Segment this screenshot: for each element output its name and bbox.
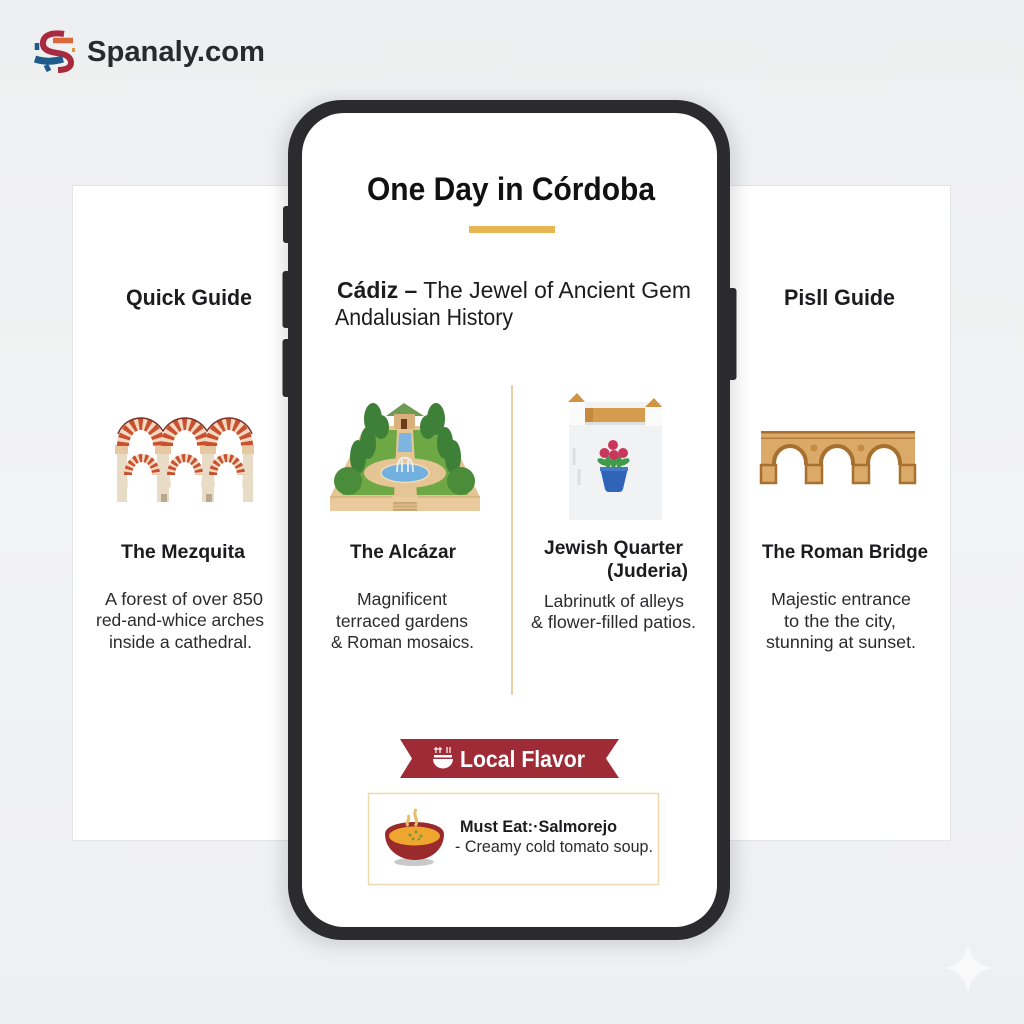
attraction title: The Roman Bridge: The Roman Bridge: [762, 542, 928, 563]
logo wordmark: Spanaly.com: [87, 36, 265, 68]
attraction description: Roman Bridge: Majestic entrance: [771, 589, 911, 609]
subtitle: Cádiz – The Jewel of Ancient Gem: [337, 277, 691, 303]
column: The Alcázar: [330, 403, 480, 652]
attraction description: Jewish Quarter: Labrinutk of alleys: [544, 591, 684, 611]
banner: Local Flavor: [400, 739, 619, 778]
attraction description: Alcázar: terraced gardens: [336, 611, 468, 631]
attraction description: Mezquita: red-and-whice arches: [96, 610, 264, 630]
attraction description: Jewish Quarter: [531, 591, 696, 632]
attraction title: Jewish Quarter (Juderia): [544, 538, 688, 582]
subtitle: [335, 277, 691, 330]
icon: Roman bridge: [761, 431, 915, 484]
title underline: [469, 226, 555, 233]
callout text: Must Eat:·Salmorejo: [460, 817, 617, 836]
icon: whitewashed wall with flower pot: [568, 393, 662, 520]
attraction description: Mezquita: [96, 589, 264, 652]
attraction description: Mezquita: A forest of over 850: [105, 589, 263, 609]
left card heading: Quick Guide: [126, 285, 252, 310]
callout text: - Creamy cold tomato soup.: [455, 837, 653, 856]
attraction description: Jewish Quarter: & flower-filled patios.: [531, 612, 696, 632]
attraction description: Alcázar: Magnificent: [357, 589, 447, 609]
icon: bowl: [433, 747, 453, 768]
phone frame: [282, 100, 736, 940]
attraction description: Alcázar: [331, 589, 474, 652]
attraction title: Jewish Quarter (Juderia): Jewish Quarter: [544, 538, 684, 559]
attraction title: The Alcázar: The Alcázar: [350, 542, 457, 563]
icon: Mezquita arches: [115, 418, 254, 502]
icon: logo mark: [35, 33, 75, 71]
attraction description: Alcázar: & Roman mosaics.: [331, 632, 474, 652]
panel: left card: [72, 186, 302, 840]
attraction title: The Mezquita: The Mezquita: [121, 542, 245, 563]
callout text: [455, 817, 653, 856]
attraction description: Roman Bridge: [766, 589, 916, 652]
attraction description: Roman Bridge: to the the city,: [784, 611, 896, 631]
attraction description: Roman Bridge: stunning at sunset.: [766, 632, 916, 652]
icon: Alcázar gardens: [330, 403, 480, 511]
icon: sparkle watermark: [944, 944, 993, 992]
banner label: Local Flavor: [460, 746, 585, 772]
icon: soup bowl: [385, 809, 444, 866]
attraction title: Jewish Quarter (Juderia): (Juderia): [607, 561, 688, 582]
title: One Day in Córdoba: [367, 171, 655, 207]
logo: Spanaly.com: [35, 33, 265, 71]
column: Jewish Quarter: [531, 393, 696, 632]
right card heading: Pisll Guide: [784, 285, 895, 310]
subtitle: Andalusian History: [335, 304, 513, 330]
phone side buttons: [282, 206, 736, 397]
callout: Must Eat: [368, 794, 658, 884]
panel: right card: [720, 186, 950, 840]
attraction description: Mezquita: inside a cathedral.: [109, 632, 252, 652]
